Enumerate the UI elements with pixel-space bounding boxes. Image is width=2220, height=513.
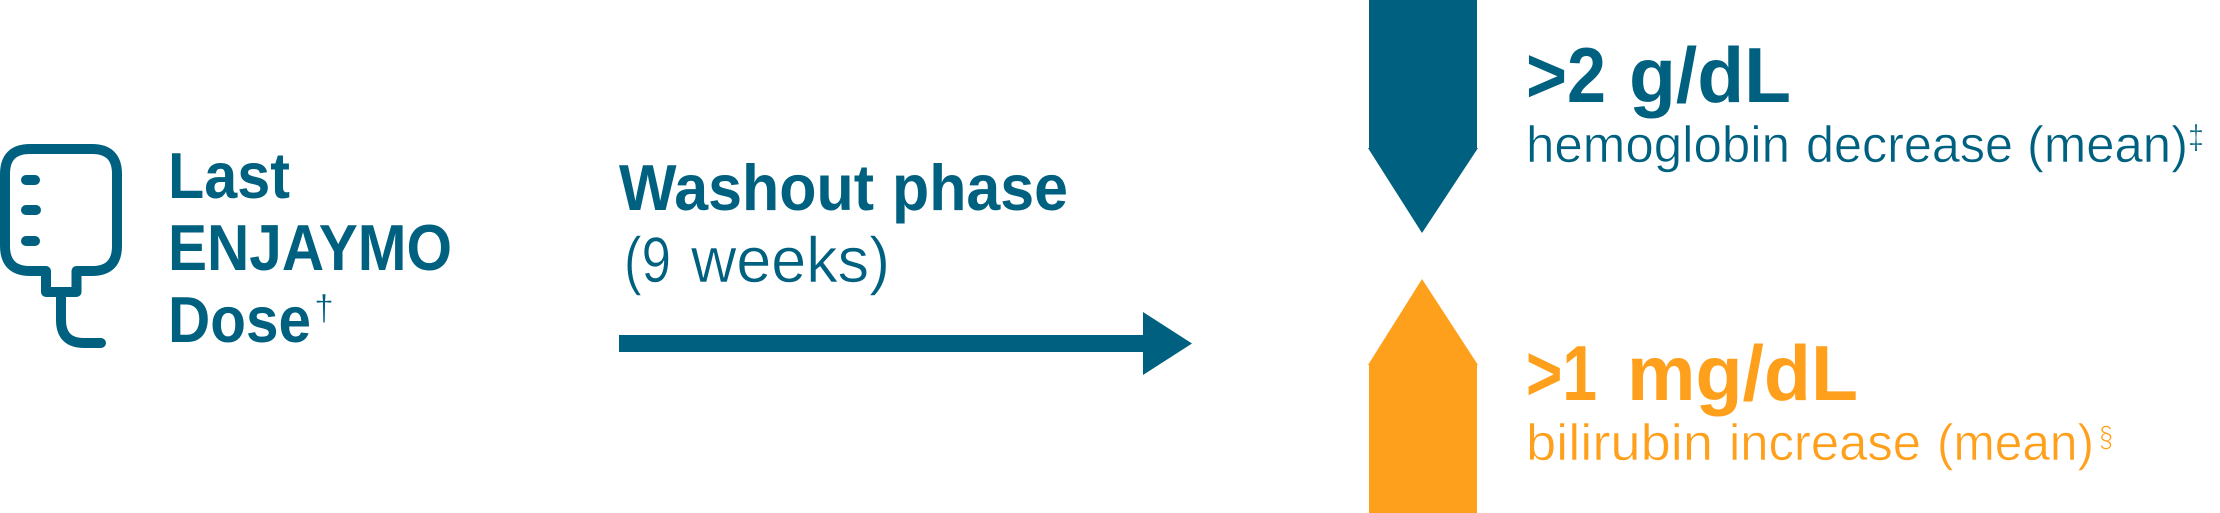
heading: last ENJAYMO dose: ENJAYMO [168,211,452,284]
stat: bilirubin increase [1526,329,2113,471]
stat: hemoglobin decrease: (mean) [2027,116,2188,173]
stat: hemoglobin decrease: >2 [1526,31,1606,119]
arrow: hemoglobin down [1368,0,1478,233]
heading: washout phase [619,151,1068,296]
stat: hemoglobin decrease: ‡ [2188,119,2204,157]
stat: hemoglobin decrease: decrease [1806,116,2013,173]
stat: bilirubin increase: increase [1729,414,1921,471]
arrow: bilirubin up [1368,279,1478,513]
arrow: timeline [619,312,1192,375]
icon: infusion bag [5,149,117,343]
stat: bilirubin increase: bilirubin [1526,414,1713,471]
heading: washout phase: (9 [624,224,671,296]
heading: washout phase: Washout [619,151,874,224]
stat: hemoglobin decrease: hemoglobin [1526,116,1790,173]
stat: hemoglobin decrease [1526,31,2204,173]
heading: washout phase: weeks) [690,224,890,296]
heading: washout phase: phase [892,151,1068,224]
heading: last ENJAYMO dose [168,139,452,356]
stat: bilirubin increase: mg/dL [1627,329,1858,417]
stat: bilirubin increase: § [2099,421,2113,454]
stat: bilirubin increase: (mean) [1937,414,2094,471]
stat: bilirubin increase: >1 [1526,329,1597,417]
heading: last ENJAYMO dose: Dose [168,283,311,356]
heading: last ENJAYMO dose: Last [168,139,290,212]
heading: last ENJAYMO dose: † [314,287,334,328]
stat: hemoglobin decrease: g/dL [1629,31,1791,119]
